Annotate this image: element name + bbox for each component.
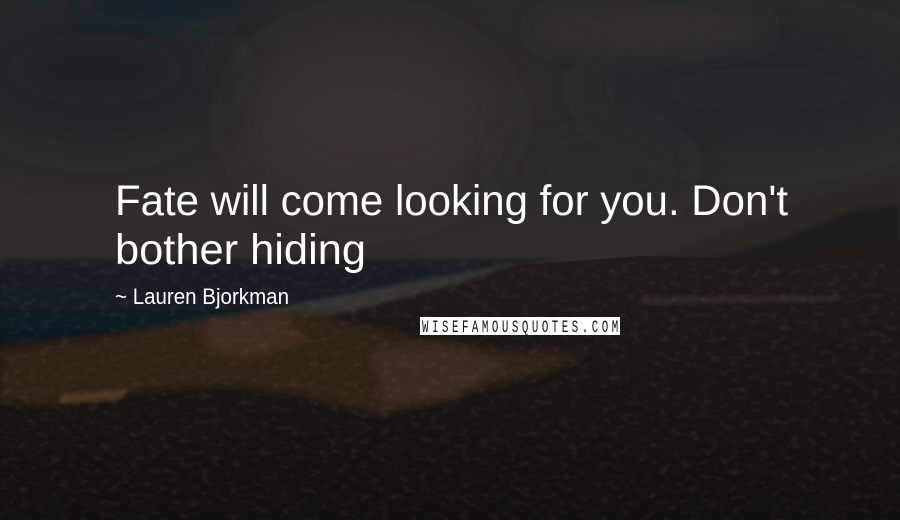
- quote text: [115, 177, 788, 274]
- watermark logo: WISEFAMOUSQUOTES.COM: [422, 319, 618, 338]
- quote text: bother hiding: [115, 226, 366, 274]
- author attribution: ~ Lauren Bjorkman: [115, 284, 289, 309]
- background photo: mountain: [640, 177, 900, 300]
- background photo: land: [0, 240, 900, 520]
- background photo: sky: [0, 0, 900, 270]
- background photo: sea: [0, 258, 560, 345]
- quote text: Fate will come looking for you. Don't: [115, 177, 788, 225]
